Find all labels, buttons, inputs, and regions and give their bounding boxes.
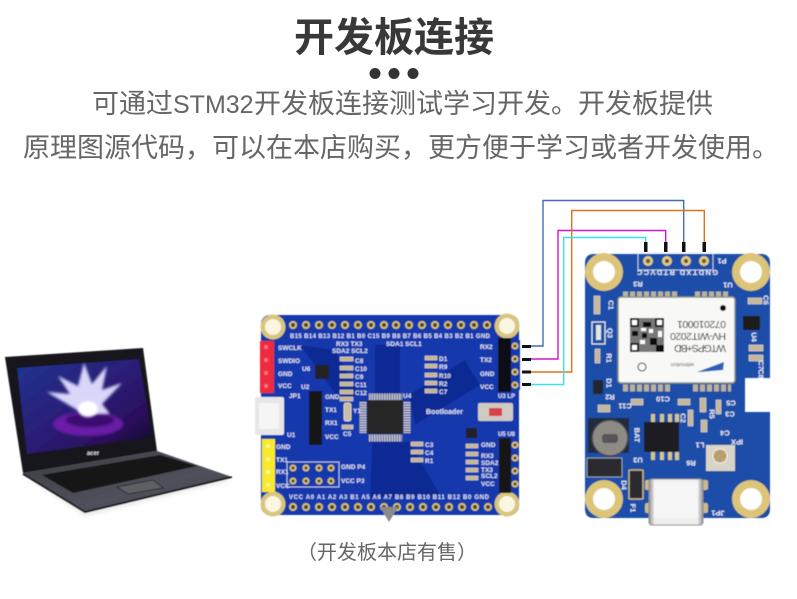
board silkscreen labels: VCC A0 A1 A2 A3 B1 A5 A6 A7 B8 B9 B10 B11 B12 B0 GND — [289, 495, 490, 501]
board labels: R1 — [604, 353, 614, 363]
gray triangle marker — [380, 507, 398, 522]
board silkscreen labels: C7 — [439, 389, 448, 396]
module product name: WTGPS+BD — [674, 342, 726, 354]
bottom pin row — [290, 504, 491, 510]
GPS board substrate — [585, 254, 770, 518]
board silkscreen labels: C3 — [425, 442, 434, 449]
laptop lid — [5, 348, 157, 473]
witmotion logo: witmotion — [671, 361, 695, 367]
U5 header — [499, 438, 518, 493]
board silkscreen labels: RX3 — [481, 453, 494, 460]
mounting hole centres — [593, 261, 762, 510]
mounting holes — [260, 314, 520, 516]
description text — [23, 89, 779, 163]
board silkscreen labels: U1 — [287, 432, 296, 439]
U2 header — [309, 391, 322, 445]
board silkscreen labels: U4 — [403, 393, 412, 400]
F1 fuse — [629, 470, 643, 499]
board silkscreen labels: RX1 — [325, 420, 338, 427]
board silkscreen labels: Y1 — [353, 408, 361, 415]
module solder pads — [623, 295, 731, 388]
module serial number: 072010001 — [677, 318, 726, 330]
board silkscreen labels: GND P4 — [341, 464, 366, 471]
board silkscreen labels: R9 — [439, 364, 448, 371]
description text: 可通过 — [92, 89, 173, 119]
trace patches — [300, 345, 480, 498]
yellow serial header — [262, 439, 275, 492]
board silkscreen labels: C9 — [355, 374, 364, 381]
board silkscreen labels: GND — [325, 394, 340, 401]
board silkscreen labels: C10 — [355, 366, 367, 373]
right resistor column — [411, 356, 478, 480]
red SWD header — [260, 341, 274, 393]
board silkscreen labels: D1 — [439, 356, 448, 363]
board silkscreen labels: VCC — [276, 483, 290, 490]
board labels: U1 — [723, 280, 733, 290]
board silkscreen labels — [276, 334, 516, 501]
QR code — [630, 318, 664, 352]
board labels — [604, 256, 770, 518]
board labels: GNDTXD RTDVCC — [636, 268, 718, 277]
board labels: Q3 — [606, 328, 614, 338]
U4 chip — [743, 316, 760, 330]
description text: 原理图源代码，可以在本店购买，更方便于学习或者开发使用。 — [23, 133, 779, 163]
board labels: BAT — [632, 428, 642, 443]
board silkscreen labels: C11 — [355, 382, 367, 389]
board silkscreen labels: TX3 — [481, 467, 493, 474]
board silkscreen labels: SWDIO — [278, 358, 300, 365]
witmotion logo — [671, 361, 724, 372]
board labels: R2 — [605, 392, 615, 402]
mounting hole centres — [265, 318, 515, 512]
laptop shadow — [25, 462, 232, 516]
board labels: C11 — [618, 402, 632, 410]
cyan wire — [530, 238, 646, 384]
magenta wire — [530, 230, 666, 359]
board silkscreen labels: R2 — [439, 381, 448, 388]
board silkscreen labels: R10 — [439, 373, 451, 380]
board silkscreen labels: GND — [481, 442, 496, 449]
board labels: C4 — [719, 428, 730, 438]
board silkscreen labels: VCC — [480, 384, 494, 391]
compliance mark — [638, 363, 646, 371]
board silkscreen labels: GND — [278, 371, 293, 378]
GPS module — [585, 253, 770, 525]
orange wire — [530, 210, 704, 372]
U3 chip — [644, 414, 679, 460]
P3 P4 pin boxes — [287, 462, 339, 487]
board labels: U4 — [750, 332, 758, 343]
touchpad — [117, 480, 163, 494]
laptop logo: acer — [87, 451, 100, 457]
micro USB connector — [255, 397, 284, 435]
front edge — [23, 474, 232, 512]
board silkscreen labels: SDA1 SCL1 — [386, 341, 422, 348]
board silkscreen labels: R1 — [425, 458, 434, 465]
board labels: C7 — [756, 360, 766, 370]
laptop — [5, 348, 232, 516]
decorative three dots — [370, 68, 418, 79]
board silkscreen labels: RX1 — [276, 469, 289, 476]
board labels: C3 — [725, 410, 735, 418]
GPS shield can — [618, 297, 735, 383]
wire end stubs — [522, 242, 706, 386]
board silkscreen labels: C5 — [343, 431, 352, 438]
board labels: U3 — [633, 456, 643, 464]
D4 diode — [587, 458, 622, 477]
laptop screen — [17, 359, 152, 454]
module dot — [720, 305, 726, 311]
D1 diode — [593, 380, 603, 394]
U6 small chip — [315, 365, 329, 379]
board labels: L1 — [696, 440, 704, 450]
IPX connector — [706, 445, 735, 471]
board labels: D1 — [604, 378, 614, 388]
P1 header pads — [638, 253, 713, 270]
board silkscreen labels: U5 U8 — [498, 432, 516, 438]
board labels: F1 — [628, 504, 638, 512]
bootloader button — [478, 403, 513, 421]
description text: 开发板连接测试学习开发。开发板提供 — [254, 89, 713, 119]
board labels: R6 — [686, 458, 696, 468]
module model number: HV-WIT2020 — [670, 330, 726, 342]
board silkscreen labels: U2 — [301, 384, 310, 391]
board labels: C5 — [726, 398, 736, 408]
board silkscreen labels: VCC — [481, 481, 495, 488]
USB-C connector — [645, 479, 708, 525]
caption: （开发板本店有售） — [297, 541, 477, 564]
board silkscreen labels: SDA2 — [481, 460, 499, 467]
crystal Y1 — [344, 403, 351, 421]
board silkscreen labels: SWCLK — [278, 345, 302, 352]
battery — [588, 418, 629, 456]
board labels: P1 — [717, 256, 727, 266]
capacitor column — [340, 357, 353, 429]
board silkscreen labels: RX3 TX3 — [336, 341, 363, 348]
board labels: R3 — [633, 280, 643, 288]
board labels: JP1 — [711, 508, 725, 518]
small passives — [594, 296, 763, 432]
board silkscreen labels: TX1 — [276, 457, 288, 464]
laptop base — [23, 451, 232, 512]
board silkscreen labels: C12 — [355, 390, 367, 397]
board labels: D4 — [620, 480, 628, 491]
board silkscreen labels: VCC P3 — [341, 478, 365, 485]
LED D3 — [592, 322, 605, 344]
board labels: C8 — [756, 369, 766, 379]
keyboard — [42, 455, 197, 493]
Q1 transistor — [466, 428, 477, 438]
board silkscreen labels: VCC — [325, 434, 339, 441]
board silkscreen labels: U3 LP — [498, 394, 515, 400]
board substrate — [261, 315, 519, 515]
mounting holes — [585, 253, 770, 518]
board silkscreen labels: C8 — [355, 358, 364, 365]
top pin row — [290, 322, 490, 328]
connection wires — [530, 200, 704, 384]
board silkscreen labels: GND — [480, 371, 495, 378]
board labels: C10 — [656, 394, 670, 404]
board silkscreen labels: SCL2 — [481, 473, 498, 480]
board silkscreen labels: TX2 — [480, 357, 492, 364]
board silkscreen labels: RX2 — [480, 344, 493, 351]
screen flower artwork — [47, 363, 123, 436]
board labels: C1 — [606, 300, 616, 310]
board silkscreen labels: C4 — [425, 450, 434, 457]
blue wire — [530, 200, 684, 346]
board labels: C2 — [678, 413, 688, 423]
title: 开发板连接 — [294, 16, 494, 60]
board silkscreen labels: GND — [276, 444, 291, 451]
board labels: IPX — [731, 438, 743, 446]
board labels: C6 — [762, 295, 770, 305]
board silkscreen labels: U6 — [302, 366, 311, 373]
board silkscreen labels: B15 B14 B13 B12 B1 B0 C15 B9 B8 B7 B6 B5 B4 B3 B2 B1 GND — [290, 334, 491, 340]
main MCU chip — [363, 397, 407, 438]
board silkscreen labels: SDA2 SCL2 — [332, 348, 368, 355]
right UART header — [498, 338, 520, 392]
breakout board — [255, 314, 520, 522]
board silkscreen labels: VCC — [278, 383, 292, 390]
board silkscreen labels: TX1 — [325, 407, 337, 414]
board labels: R5 — [708, 409, 716, 419]
description text: STM32 — [173, 91, 254, 119]
board silkscreen labels: JP1 — [289, 393, 301, 400]
board silkscreen labels: Bootloader — [426, 409, 463, 416]
